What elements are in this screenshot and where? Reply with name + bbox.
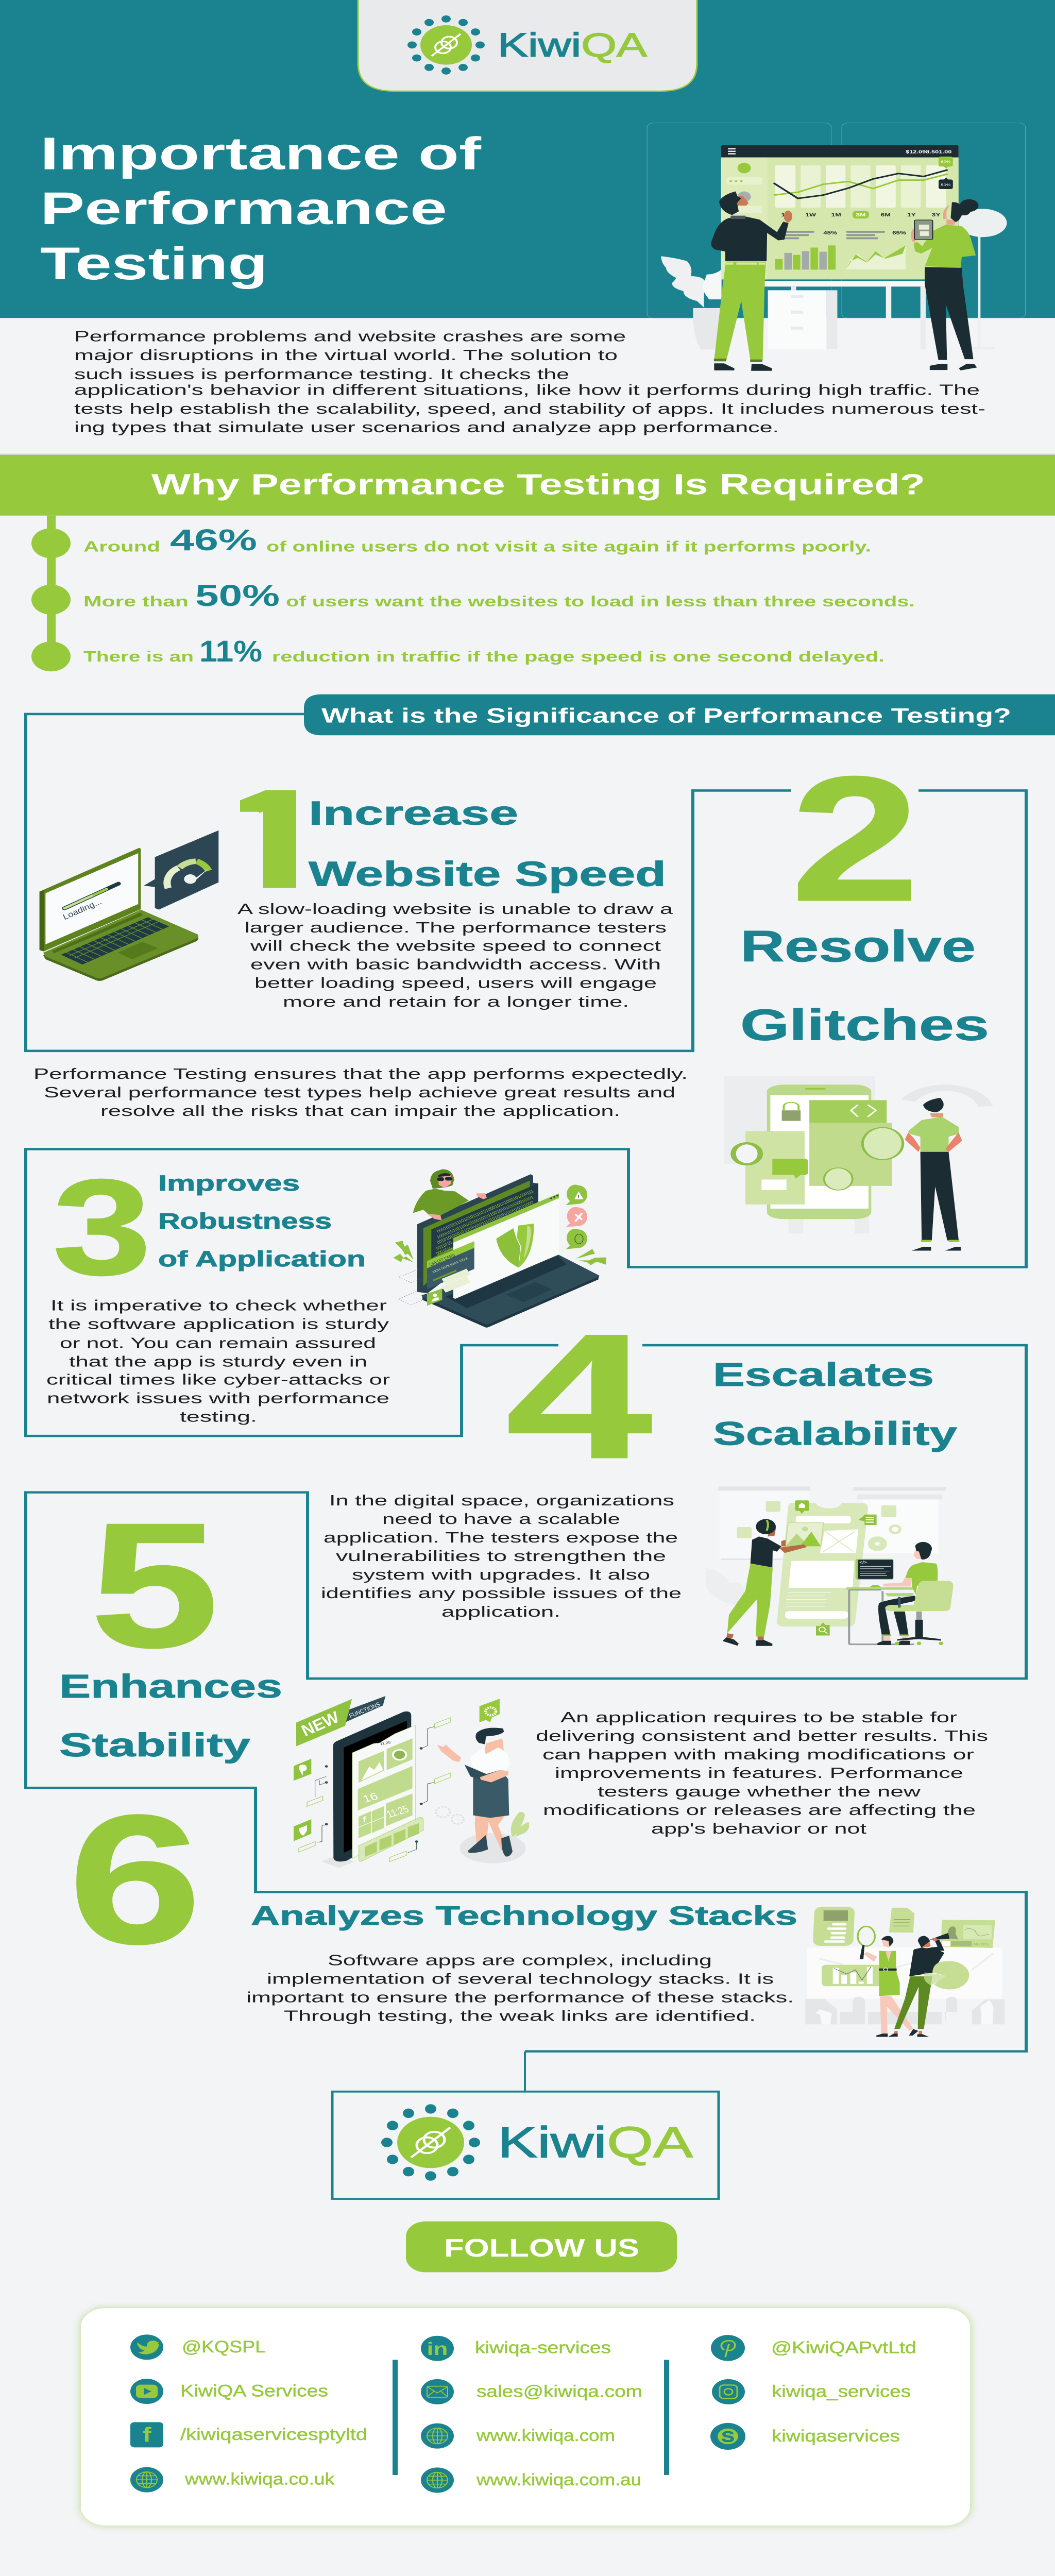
body text: improvements in features. Performance [555,1765,963,1782]
body text: Software apps are complex, including [328,1952,712,1969]
contact: australia website: www.kiwiqa.com.au [476,2470,641,2489]
body text: network issues with performance [47,1390,389,1406]
intro paragraph: Performance problems and website crashes are some [74,328,626,345]
heading [309,794,666,893]
body text: application. [441,1603,560,1620]
heading: Robustness [158,1209,332,1233]
stat: 46 percent: 46% [170,524,257,557]
body text: It is imperative to check whether [50,1297,387,1314]
section 4: escalates scalability [321,1297,957,1646]
icon: woman presenting new phone functions: 11:25 [380,1740,391,1746]
intro paragraph: tests help establish the scalability, speed, and stability of apps. It includes numerous test- [74,400,985,417]
footer logo icon [381,2104,480,2181]
icon: hacker breaking laptop shield: 0111010 [435,1241,453,1250]
icon: laptop with speed gauge [40,831,218,981]
icon: woman presenting new phone functions [294,1696,529,1868]
body text: identifies any possible issues of the [321,1585,682,1602]
dashboard screen: ★★★ [728,179,744,184]
heading: Stability [59,1726,251,1764]
icon: man examining mobile app [724,1076,985,1251]
hero illustration: team reading dashboard [647,123,1025,371]
header teal band [0,0,1055,318]
heading: Increase [309,794,518,832]
number 4: 4 [505,1297,654,1495]
icon: designers building an app: </> [859,1560,867,1565]
body text [33,1065,688,1120]
contact: facebook: f [142,2424,151,2446]
woman holding a tablet [911,199,979,370]
contact: skype [710,2423,900,2450]
icon: hacker breaking laptop shield: ! [577,1195,580,1199]
follow us button [406,2222,677,2272]
stat: 11 percent: reduction in traffic if the page speed is one second delayed. [272,648,884,665]
body text [46,1297,390,1425]
title: Importance of [40,128,482,179]
dashboard screen: 1 [781,212,786,218]
intro paragraph: major disruptions in the virtual world. The solution to [74,347,618,364]
plant [661,256,723,349]
contact: uk website [130,2467,334,2493]
contact: facebook [130,2422,367,2447]
contact: facebook: /kiwiqaservicesptyltd [180,2425,367,2444]
body text: important to ensure the performance of these stacks. [246,1989,794,2006]
section 1: increase website speed [40,754,673,1010]
contact card [81,2308,970,2526]
number 6: 6 [69,1777,201,1982]
banner: significance: What is the Significance of Performance Testing? [321,704,1011,727]
number 3: 3 [53,1151,151,1303]
body text: A slow-loading website is unable to draw a [237,901,673,918]
banner: significance [304,694,1055,735]
body text: need to have a scalable [382,1511,620,1528]
stat: 46 percent [83,524,871,557]
contact: linkedin [421,2336,611,2361]
icon: woman presenting new phone functions: NEW [297,1708,345,1739]
dashboard screen: 60% [941,160,950,164]
contact: australia website [421,2467,641,2493]
icon: woman presenting new phone functions: 16 [361,1790,380,1805]
logo tab [358,0,697,91]
connecting frame lines around the six sections [26,714,1026,2199]
contact: email: sales@kiwiqa.com [477,2382,642,2400]
footer logo [381,2104,693,2181]
contact: youtube [130,2379,328,2404]
contact: linkedin: kiwiqa-services [475,2338,611,2357]
section band: why performance testing [0,454,1055,516]
contact: main website [421,2424,615,2449]
dashboard screen: $12.098.501.00 [906,149,952,155]
body text: even with basic bandwidth access. With [250,956,661,973]
title [40,128,482,289]
body text: better loading speed, users will engage [254,975,657,991]
stat: 11 percent: 11% [199,635,262,668]
dashboard screen: 1M [831,212,841,218]
icon: woman presenting new phone functions: 11:25 [385,1803,411,1820]
dashboard screen: 3Y [932,212,941,218]
body text: can happen with making modifications or [542,1746,974,1763]
intro paragraph [74,328,985,436]
icon: analysts with magnifier and telescope: NEWS [973,1942,989,1946]
intro paragraph: such issues is performance testing. It checks the [74,366,569,383]
contact: pinterest: @KiwiQAPvtLtd [771,2338,916,2357]
body text: critical times like cyber-attacks or [46,1371,390,1388]
contact: twitter [130,2334,266,2360]
icon: hacker breaking laptop shield: 0001010 [435,1246,453,1256]
desk [764,281,926,349]
stat: 11 percent: There is an [83,648,194,665]
icon: hacker breaking laptop shield: 1000010101110101100101011001010101000010101 [436,1195,535,1240]
follow us button: FOLLOW US [444,2234,639,2262]
section band: why performance testing: Why Performance Testing Is Required? [151,468,925,500]
body text: application. The testers expose the [324,1529,678,1546]
icon: hacker breaking laptop shield: 0010101000101010001011101010101010010101000 [436,1200,535,1245]
footer wordmark: KiwiQA [498,2117,693,2166]
logo icon [407,15,485,75]
contact: pinterest [711,2335,916,2361]
body text: An application requires to be stable for [560,1709,957,1726]
number 2: 2 [791,739,920,938]
icon: hacker breaking laptop shield: 1234 5678 9101 1213 [432,1257,469,1274]
heading: Website Speed [309,855,666,893]
contact: twitter: @KQSPL [182,2337,266,2356]
heading: Glitches [740,1001,989,1049]
intro paragraph: ing types that simulate user scenarios and analyze app performance. [74,419,779,436]
contact: skype: kiwiqaservices [772,2427,900,2445]
body text: will check the website speed to connect [250,938,661,954]
body text: larger audience. The performance testers [245,919,667,936]
dashboard screen: 45% [823,231,837,235]
number 5: 5 [90,1486,219,1684]
section 2: resolve glitches [33,739,989,1251]
body text: testers gauge whether the new [598,1783,921,1800]
heading: Improves [158,1171,300,1195]
timeline dots [31,516,71,671]
body text [246,1952,794,2025]
contact: instagram [712,2379,911,2404]
dashboard screen: 50% [941,183,950,187]
body text: In the digital space, organizations [329,1492,674,1509]
heading: Escalates [713,1355,934,1393]
stat: 50 percent: of users want the websites to load in less than three seconds. [286,593,915,610]
body text: app's behavior or not [651,1820,867,1837]
stat: 50 percent: 50% [195,580,280,613]
dashboard screen: 6M [881,212,891,218]
stat: 46 percent: Around [83,538,160,555]
intro paragraph: application's behavior in different situations, like how it performs during high traffic. The [74,382,980,398]
dashboard screen: 3M [856,212,866,218]
heading: of Application [158,1246,366,1271]
body text: delivering consistent and better results. This [536,1727,988,1744]
body text: resolve all the risks that can impair the application. [100,1103,620,1120]
icon: woman presenting new phone functions: FUNCTIONS [347,1701,382,1719]
body text: Through testing, the weak links are identified. [284,2008,756,2025]
contact: email [421,2379,642,2404]
heading: Resolve [740,922,976,971]
stat: 50 percent [83,580,915,613]
stat: 50 percent: More than [83,593,189,610]
section 5: enhances stability [59,1486,988,1868]
body text: Several performance test types help achieve great results and [44,1084,675,1101]
dashboard screen: 1W [805,212,816,218]
contact: instagram: kiwiqa_services [772,2382,911,2400]
body text: modifications or releases are affecting the [543,1802,976,1819]
stat: 11 percent [83,635,884,668]
icon: analysts with magnifier and telescope [805,1907,1005,2037]
icon: hacker breaking laptop shield [393,1170,606,1328]
contact: uk website: www.kiwiqa.co.uk [184,2469,334,2488]
section 6: analyzes technology stacks [69,1777,1005,2037]
contact: youtube: KiwiQA Services [180,2381,328,2400]
title: Performance [40,182,447,234]
contact: main website: www.kiwiqa.com [476,2426,615,2445]
section 3: improves robustness [46,1151,606,1425]
body text: that the app is sturdy even in [69,1353,367,1370]
body text: vulnerabilities to strengthen the [336,1548,666,1565]
body text: more and retain for a longer time. [283,993,629,1010]
heading [59,1667,282,1764]
body text: testing. [180,1409,257,1425]
heading [158,1171,366,1271]
man pointing at the dashboard [711,192,792,371]
icon: hacker breaking laptop shield: CREDIT CARD [429,1253,456,1267]
stat: 46 percent: of online users do not visit a site again if it performs poorly. [266,538,871,555]
body text [536,1709,988,1837]
dashboard screen [721,145,959,279]
title: Testing [40,238,268,289]
heading: Enhances [59,1667,282,1705]
body text [237,901,673,1010]
number 1: 1 [199,754,354,944]
heading [713,1355,957,1452]
icon: woman presenting new phone functions: f [363,1815,367,1824]
body text: implementation of several technology stacks. It is [267,1971,774,1988]
dashboard screen: 65% [892,231,906,235]
body text: Performance Testing ensures that the app performs expectedly. [33,1065,688,1082]
icon: hacker breaking laptop shield: 0001010011101010111010100010101000101000111 [436,1189,535,1233]
body text [321,1492,682,1620]
body text: or not. You can remain assured [60,1335,376,1351]
icon: designers building an app [706,1486,954,1646]
logo wordmark: KiwiQA [498,26,648,64]
heading: Analyzes Technology Stacks [251,1901,797,1930]
body text: the software application is sturdy [48,1316,389,1333]
contact: linkedin: in [427,2338,448,2359]
lamp [959,209,1007,349]
body text: system with upgrades. It also [352,1566,650,1583]
icon: laptop with speed gauge: Loading... [61,897,103,922]
contact: skype: S [721,2429,735,2446]
dashboard screen: 1Y [907,212,916,218]
heading: Scalability [713,1415,957,1452]
heading [740,922,989,1049]
